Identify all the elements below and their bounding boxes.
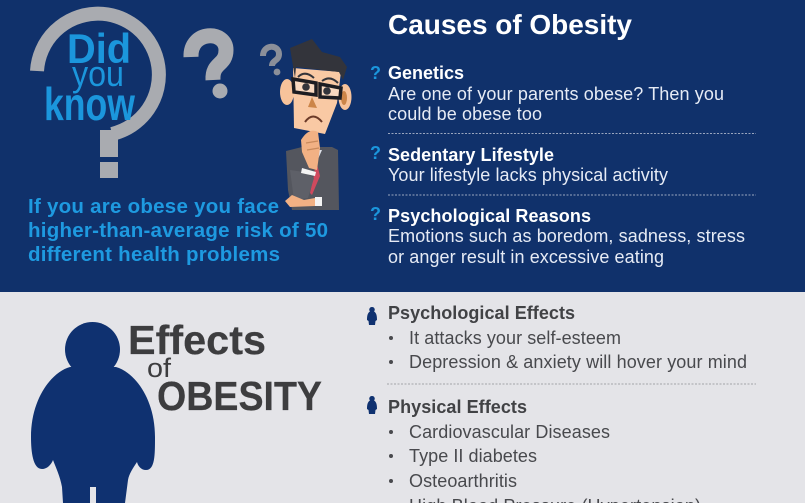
effect: physical: Osteoarthritis [409,471,517,491]
icon: obese silhouette [31,322,155,503]
heading: effects of obesity: of [147,353,172,383]
cuffs [301,168,316,176]
cause: psychological reasons: Emotions such as boredom, sadness, stress [388,226,745,246]
effect: physical: Cardiovascular Diseases [409,422,610,442]
cause: psychological reasons: Psychological Reasons [388,206,591,226]
callout: health risk [28,195,328,266]
glasses [293,79,341,98]
effect: physical: Type II diabetes [409,446,537,466]
icon: medium question mark [191,36,228,98]
cause: sedentary lifestyle: ? [370,143,381,163]
cause: psychological reasons: ? [370,204,381,224]
heading: did you know: Did [67,25,131,72]
cause: psychological reasons: or anger result in excessive eating [388,247,664,267]
face [293,68,341,134]
heading: effects of obesity [128,317,322,419]
lower hand [285,195,315,207]
icon: small question mark [263,47,280,75]
heading: did you know: know [44,78,135,130]
panel: did you know and causes [0,0,805,292]
cause: genetics: ? [370,63,381,83]
icon: thinking man [280,39,352,210]
effect: psychological: Depression & anxiety will hover your mind [409,352,747,372]
heading: effects of obesity: Effects [128,317,266,363]
callout: health risk: If you are obese you face [28,195,279,218]
heading: did you know [44,25,135,130]
cause: sedentary lifestyle: Sedentary Lifestyle [388,145,554,165]
cause: genetics: could be obese too [388,104,542,124]
brows [298,74,338,83]
nose [308,97,317,108]
hair [290,39,347,80]
effect: psychological [367,303,747,372]
icon: small silhouette [367,396,377,414]
cause: genetics: Are one of your parents obese? Then you [388,84,724,104]
suit [286,147,339,210]
callout: health risk: higher-than-average risk of 50 [28,219,328,242]
icon: large question mark [37,14,159,178]
effect: physical [367,396,701,503]
effect: psychological: It attacks your self-esteem [409,328,621,348]
callout: health risk: different health problems [28,243,280,266]
panel: effects of obesity [0,292,805,503]
icon: small silhouette [367,307,377,325]
thinking hand [301,131,320,170]
effect: physical: Physical Effects [388,397,527,417]
heading: did you know: you [72,53,124,94]
cause: genetics [370,63,724,124]
cause: genetics: Genetics [388,63,464,83]
heading: causes of obesity: Causes of Obesity [388,9,632,40]
cause: sedentary lifestyle: Your lifestyle lacks physical activity [388,165,668,185]
heading: effects of obesity: OBESITY [157,373,322,419]
cause: psychological reasons [370,204,745,267]
ears [280,79,294,105]
mouth [305,116,322,122]
cause: sedentary lifestyle [370,143,668,185]
effect: psychological: Psychological Effects [388,303,575,323]
